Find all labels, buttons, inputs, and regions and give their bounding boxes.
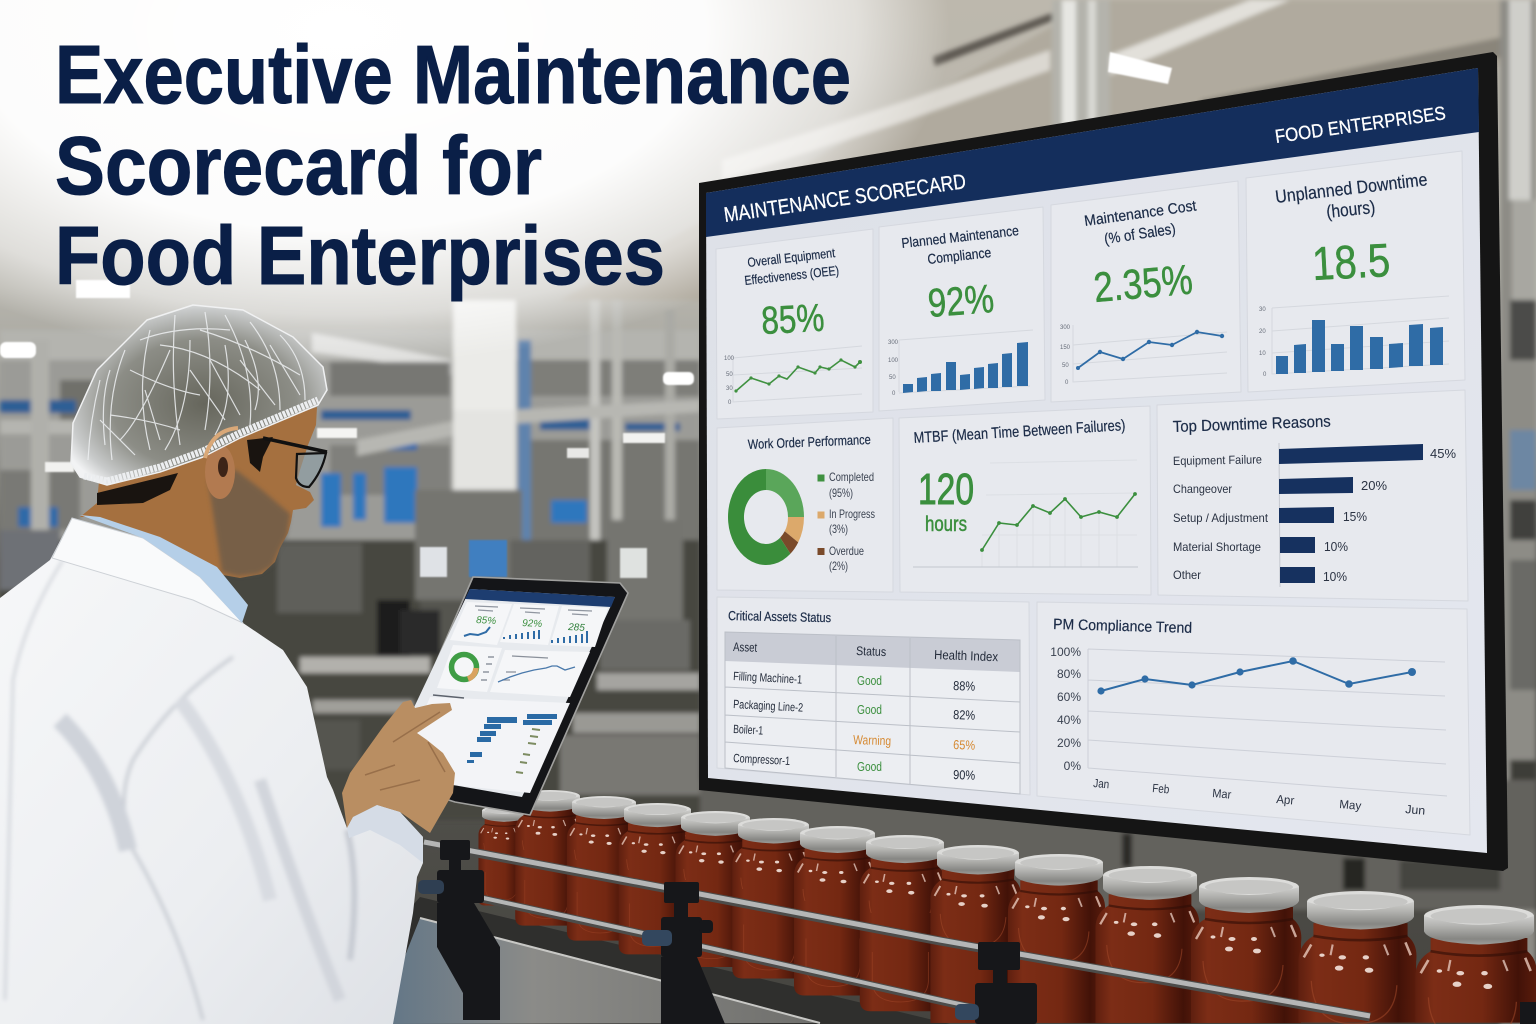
ear strap [205,428,238,458]
monitor bezel [699,52,1508,871]
guide rails [424,842,1370,1018]
reason labels: Setup / Adjustment [1173,511,1269,525]
y axis labels: 0% [1064,759,1081,773]
panel: top downtime reasons [1157,390,1468,601]
tablet [383,577,628,815]
screen header: MAINTENANCE SCORECARD [722,170,967,227]
panel: OEE: Effectiveness (OEE) [744,263,840,288]
title: Food Enterprises [55,209,665,302]
neck and face [80,407,317,578]
reason values: 10% [1323,569,1347,584]
screen header: FOOD ENTERPRISES [1274,103,1447,148]
panel: planned maintenance compliance: 100 [888,358,899,364]
panel: OEE: 50 [726,372,733,378]
coat collar [52,518,243,623]
assets table: Status [856,644,886,659]
y axis labels: 60% [1057,690,1081,704]
rail brackets [418,840,1536,1024]
panel: unplanned downtime: 18.5 [1311,233,1391,290]
panel: unplanned downtime: 30 [1259,307,1266,313]
reason values: 20% [1361,478,1387,493]
tablet line chart [490,650,590,697]
beard shadow [208,470,290,576]
downtime bars [1276,320,1443,374]
panel: OEE: 85% [760,297,825,343]
hand [342,700,455,833]
assets table: Warning [853,732,891,748]
worker [0,305,455,1024]
tablet donut [437,645,502,692]
hairnet brim [84,400,318,481]
panel: maintenance cost: 50 [1062,363,1069,369]
month labels: Apr [1276,792,1295,808]
reason labels [1173,452,1269,582]
donut legend: Overdue [829,544,864,558]
panel: unplanned downtime: 20 [1259,329,1266,335]
conveyor belt and side plate [378,897,950,1024]
panel: unplanned downtime: 0 [1263,372,1267,378]
reason values: 15% [1343,509,1367,524]
reason values: 10% [1324,539,1348,554]
PM trend line [1097,657,1416,695]
ear [205,445,235,499]
title: Scorecard for [55,119,542,212]
tablet header [465,589,615,607]
panel: planned maintenance compliance: 50 [889,375,896,381]
panel: MTBF: hours [925,513,967,536]
shirt collar [80,515,248,623]
donut legend: (95%) [829,486,853,500]
assets table: Good [857,673,882,688]
wall monitor [699,52,1508,871]
donut legend: (3%) [829,522,848,536]
panel: planned maintenance compliance: 300 [888,340,899,346]
tablet screen [383,589,615,797]
panel: MTBF: MTBF (Mean Time Between Failures) [913,417,1126,447]
panel: planned maintenance compliance: 0 [892,391,896,397]
donut legend [818,470,875,573]
panel: planned maintenance compliance: Planned Maintenance [901,222,1020,251]
assets table: Good [857,759,882,774]
title [55,28,851,302]
panel: MTBF: 120 [918,465,974,514]
panel: unplanned downtime: Unplanned Downtime [1274,169,1428,207]
glasses [263,438,327,487]
panel: PM compliance trend: PM Compliance Trend [1053,616,1192,637]
panel: maintenance cost: 150 [1060,345,1071,351]
panel: unplanned downtime: (hours) [1325,197,1376,222]
panel: OEE: 100 [724,356,735,362]
month labels: Jun [1405,802,1426,818]
assets table: Compressor-1 [733,751,791,768]
reason values [1323,446,1456,584]
finger shading [365,712,445,790]
tablet KPI cards: 92% [522,618,543,630]
panel: unplanned downtime: 10 [1259,351,1266,357]
y axis labels [1050,645,1081,773]
panel: maintenance cost [1051,181,1241,402]
panel: critical assets status [717,597,1030,795]
coat [0,518,423,1024]
panel: maintenance cost: 300 [1060,325,1071,331]
assets table: Asset [733,640,758,655]
tablet bar list [400,695,570,793]
donut legend: In Progress [829,507,875,521]
MTBF line [980,492,1137,552]
panel: OEE [716,229,873,419]
panel: unplanned downtime [1246,151,1465,392]
tablet KPI cards: 285 [567,622,586,634]
reason bars [1279,444,1423,583]
panel: work order performance: Work Order Performance [748,432,871,452]
compliance bars [903,342,1028,393]
panel: maintenance cost: Maintenance Cost [1083,197,1198,230]
donut chart [728,469,804,565]
tablet KPI cards: 85% [476,615,497,627]
panel: work order performance [717,418,893,592]
panel: PM compliance trend [1037,602,1470,835]
month labels: May [1339,797,1362,813]
tablet KPI cards [450,602,608,647]
y axis labels: 100% [1050,645,1081,659]
monitor screen [706,68,1487,853]
donut legend: Completed [829,470,874,484]
panel: MTBF [899,406,1151,595]
coat folds [5,560,354,1020]
screen header [706,68,1479,237]
assets table: Packaging Line-2 [733,697,804,715]
assets table: Health Index [934,647,999,664]
assets table [725,632,1020,794]
shirt cuff [347,805,423,863]
panel: OEE: 30 [726,386,733,392]
reason labels: Equipment Failure [1173,452,1262,468]
reason labels: Material Shortage [1173,540,1261,554]
title: Executive Maintenance [55,28,851,121]
assets table: 90% [953,767,976,783]
machine screens and ceiling lights [0,52,1172,578]
assets table: 65% [953,737,976,753]
assets table: Boiler-1 [733,722,764,738]
month labels: Feb [1152,781,1170,796]
panel: OEE: Overall Equipment [747,245,836,270]
assets table: 82% [953,707,976,723]
y axis labels: 80% [1057,667,1081,681]
assets table: Filling Machine-1 [733,669,803,687]
y axis labels: 40% [1057,713,1081,727]
panel: planned maintenance compliance: Compliance [927,244,992,267]
reason labels: Changeover [1173,482,1232,496]
donut legend: (2%) [829,559,848,573]
cost line [1076,330,1224,370]
panel: planned maintenance compliance [879,207,1045,411]
panel: critical assets status: Critical Assets Status [728,608,832,625]
OEE sparkline [734,358,862,393]
assets table: 88% [953,678,976,694]
month labels: Mar [1212,786,1232,802]
panel: maintenance cost: (% of Sales) [1103,221,1177,248]
hair [97,437,273,505]
month labels [1093,776,1426,818]
panel: top downtime reasons: Top Downtime Reasons [1173,413,1331,436]
tomato sauce jars [478,790,1536,1024]
tablet body [385,577,628,815]
panel: OEE: 0 [728,400,732,406]
reason labels: Other [1173,568,1201,582]
assets table: Good [857,702,882,717]
hairnet [71,305,327,485]
panel: maintenance cost: 0 [1065,380,1069,386]
panel: maintenance cost: 2.35% [1092,256,1194,311]
panel: planned maintenance compliance: 92% [926,277,995,326]
month labels: Jan [1093,776,1110,791]
hairnet fibres [88,312,305,460]
reason values: 45% [1430,446,1456,461]
y axis labels: 20% [1057,736,1081,750]
